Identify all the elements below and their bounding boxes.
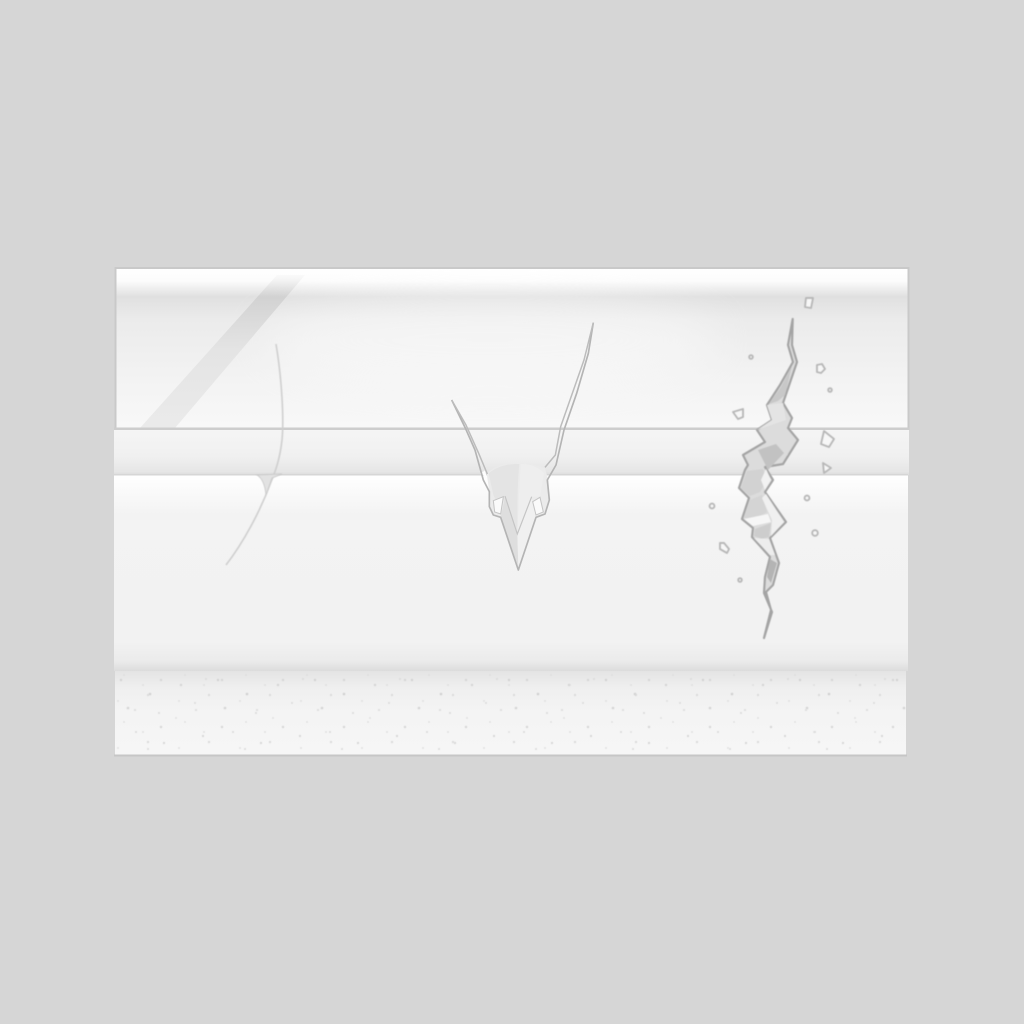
crack 1: hairline: [226, 344, 283, 565]
fragment: [749, 355, 753, 359]
glass reflection streak: [140, 275, 305, 428]
fragment: [817, 364, 825, 373]
panel: layered surface cross-section: [114, 268, 909, 756]
fragment: [710, 504, 714, 508]
horn inner lines: [452, 323, 593, 474]
layer: middle coat: [114, 428, 909, 475]
layer: top glass coat: [115, 268, 909, 429]
fragment: [805, 298, 813, 308]
layer: main body: [114, 474, 908, 671]
wedge outline and horns: [452, 323, 593, 570]
fracture outline: [739, 319, 798, 638]
debris fragments: [710, 298, 834, 582]
crack 3: severe fracture: [739, 319, 798, 638]
infographic canvas: [114, 267, 910, 756]
fragment: [720, 543, 729, 553]
crack 2: moderate wedge: [452, 323, 593, 570]
fragment: [805, 496, 809, 500]
layer: speckled base: [114, 671, 907, 756]
fragment: [823, 463, 831, 473]
fragment: [821, 431, 834, 447]
fragment: [738, 578, 742, 582]
fragment: [733, 409, 743, 419]
fracture facets: [757, 403, 786, 430]
fragment: [828, 388, 832, 392]
wedge facets: [489, 464, 519, 533]
wedge body: [487, 464, 549, 570]
fragment: [812, 530, 818, 536]
